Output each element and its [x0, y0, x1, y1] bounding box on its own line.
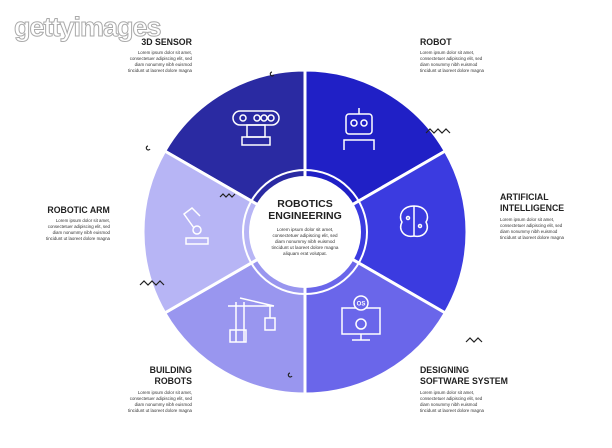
label: AI [500, 192, 564, 214]
icon: robotic arm [184, 208, 208, 244]
label: designing software: SOFTWARE SYSTEM [420, 376, 508, 387]
text: tincidunt ut laoreet dolore magna [128, 68, 192, 73]
text: consectetuer adipiscing elit, sed [420, 396, 482, 401]
icon: monitor OS [342, 296, 380, 340]
label: designing software: DESIGNING [420, 365, 469, 376]
text: consectetuer adipiscing elit, sed [420, 56, 482, 61]
text: tincidunt ut laoreet dolore magna [420, 408, 484, 413]
segment: 3D sensor [165, 70, 305, 232]
decorations [140, 72, 482, 377]
text: Lorem ipsum dolor sit amet, [138, 50, 192, 55]
label: robot: ROBOT [420, 37, 452, 48]
center title [268, 198, 342, 256]
center title: tincidunt ut laoreet dolore magna [272, 245, 338, 250]
text: tincidunt ut laoreet dolore magna [420, 68, 484, 73]
center title: ROBOTICS [277, 198, 333, 210]
center title: Lorem ipsum dolor sit amet, [277, 227, 333, 232]
text: diam nonummy nibh euismod [500, 229, 557, 234]
text: consectetuer adipiscing elit, sed [130, 396, 192, 401]
segment: robotic arm [143, 151, 305, 313]
text: diam nonummy nibh euismod [420, 62, 477, 67]
text: tincidunt ut laoreet dolore magna [46, 236, 110, 241]
label: building robots: BUILDING [150, 365, 192, 376]
icon: 3D sensor [233, 111, 279, 145]
text: diam nonummy nibh euismod [135, 62, 192, 67]
icon: brain [400, 206, 428, 236]
text: Lorem ipsum dolor sit amet, [420, 50, 474, 55]
label: building robots: ROBOTS [155, 376, 192, 387]
text: consectetuer adipiscing elit, sed [500, 223, 562, 228]
segment: AI [305, 151, 467, 313]
center title: consectetuer adipiscing elit, sed [272, 233, 338, 238]
text: consectetuer adipiscing elit, sed [130, 56, 192, 61]
text: diam nonummy nibh euismod [53, 230, 110, 235]
center title: ENGINEERING [268, 210, 342, 222]
icon: robot [344, 108, 374, 150]
icon: crane [228, 298, 275, 342]
segment: building robots [165, 232, 305, 394]
label: building robots [150, 365, 192, 387]
text: Lorem ipsum dolor sit amet, [56, 218, 110, 223]
text: tincidunt ut laoreet dolore magna [128, 408, 192, 413]
center title: diam nonummy nibh euismod [275, 239, 335, 244]
watermark: gettyimages [14, 12, 161, 42]
inner ring [243, 170, 367, 294]
label: 3D sensor: 3D SENSOR [141, 37, 192, 48]
label: AI: ARTIFICIAL [500, 192, 549, 203]
text: Lorem ipsum dolor sit amet, [500, 217, 554, 222]
diagram: OS [357, 302, 365, 308]
text: diam nonummy nibh euismod [135, 402, 192, 407]
text: consectetuer adipiscing elit, sed [48, 224, 110, 229]
text: Lorem ipsum dolor sit amet, [138, 390, 192, 395]
text: tincidunt ut laoreet dolore magna [500, 235, 564, 240]
segment: designing software [305, 232, 445, 394]
label: AI: INTELLIGENCE [500, 203, 564, 214]
label: robotic arm: ROBOTIC ARM [48, 205, 110, 216]
text: Lorem ipsum dolor sit amet, [420, 390, 474, 395]
center title: aliquam erat volutpat. [283, 251, 327, 256]
text: diam nonummy nibh euismod [420, 402, 477, 407]
label: designing software [420, 365, 508, 387]
segment: robot [305, 70, 445, 232]
